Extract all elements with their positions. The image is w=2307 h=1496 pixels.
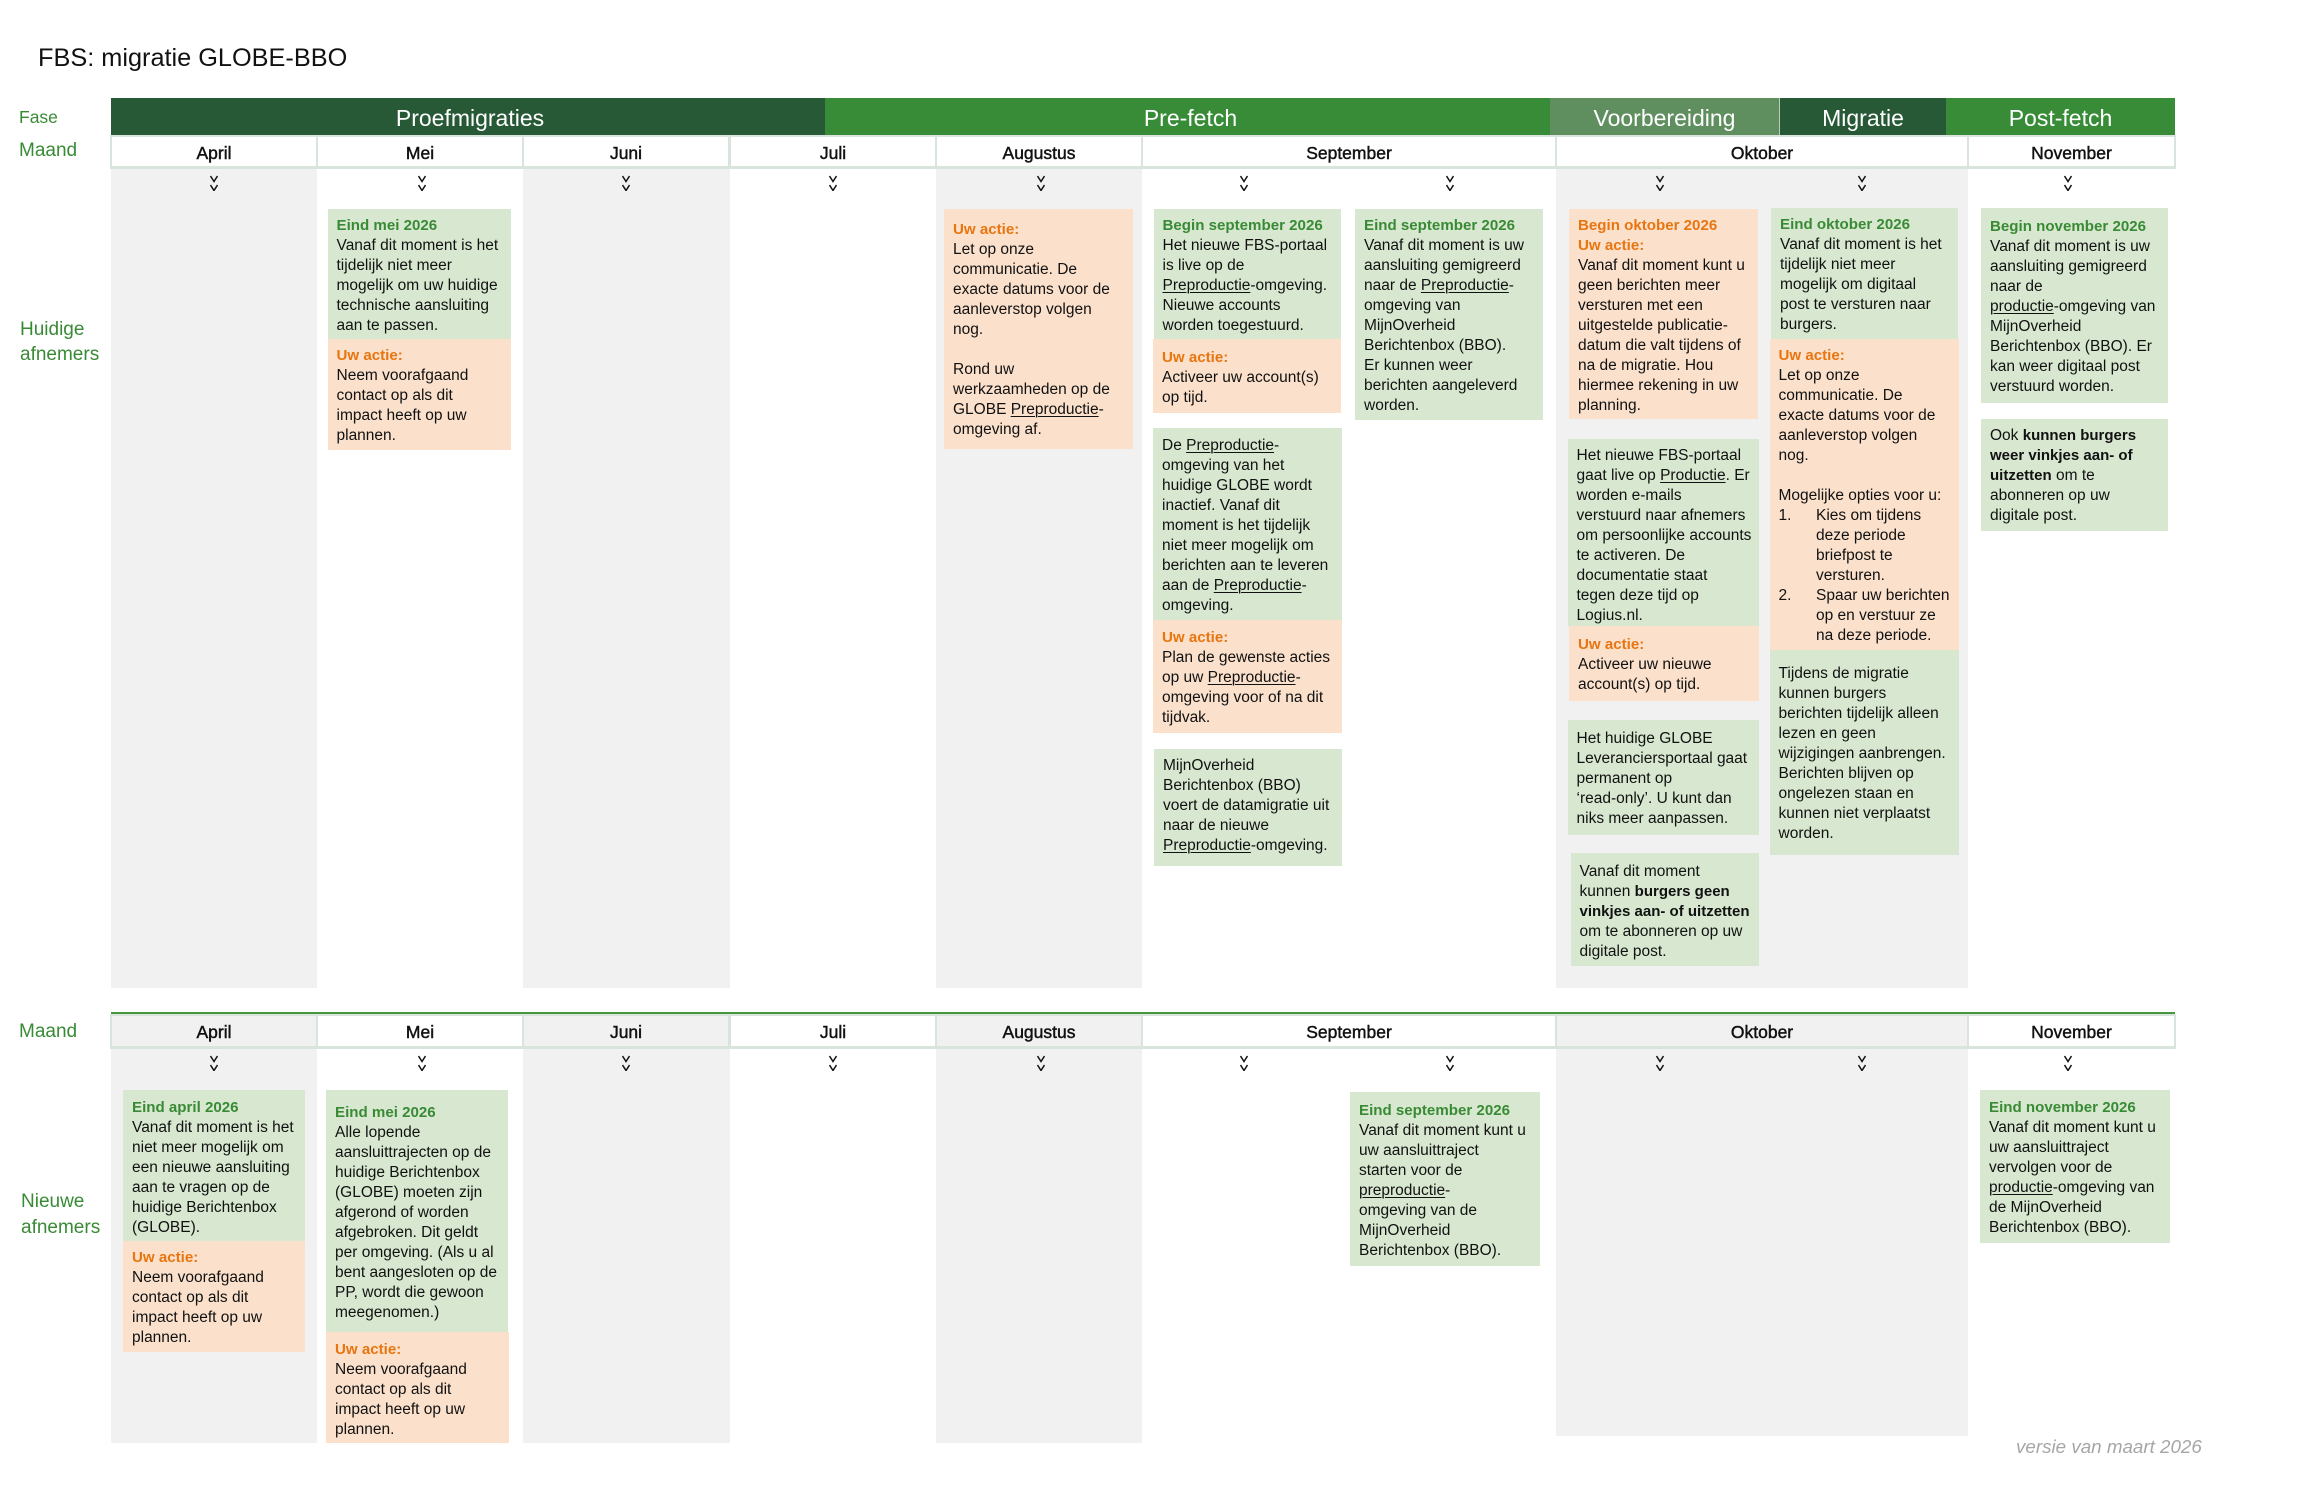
card: Eind mei 2026 (huidige afnemers) <box>328 209 511 450</box>
month: April <box>110 1014 318 1049</box>
card info: huidige GLOBE wordt <box>1162 477 1312 494</box>
card info: om persoonlijke accounts <box>1576 527 1751 544</box>
month: Oktober: Oktober <box>1731 143 1793 163</box>
card action: op tijd. <box>1162 389 1208 406</box>
card info: inactief. Vanaf dit <box>1162 497 1280 514</box>
side label: Huidige afnemers <box>20 319 99 365</box>
month: September <box>1141 135 1557 169</box>
card: Eind september 2026 (nieuwe afnemers): omgeving van de <box>1359 1202 1477 1218</box>
card: Eind september 2026 (nieuwe afnemers): starten voor de <box>1359 1162 1462 1178</box>
card: Augustus actie <box>944 209 1133 449</box>
card action: impact heeft op uw <box>335 1400 465 1418</box>
card info: tijdelijk niet meer <box>336 257 452 274</box>
card: vinkjes uitzetten <box>1570 853 1759 966</box>
version note: versie van maart 2026 <box>2016 1436 2202 1457</box>
card action: plannen. <box>335 1420 394 1438</box>
icon: chevron Mei <box>418 176 426 191</box>
card note: Berichten blijven op <box>1778 764 1914 782</box>
card: Eind september 2026: Eind september 2026 <box>1364 217 1515 234</box>
card note: wijzigingen aanbrengen. <box>1778 744 1946 762</box>
month: Juli <box>729 135 937 169</box>
card: Begin november 2026: aansluiting gemigreerd <box>1990 258 2147 275</box>
month: Mei: Mei <box>406 1022 434 1042</box>
card info: Preproductie-omgeving. <box>1162 277 1327 294</box>
card: Eind november 2026 (nieuwe afnemers): uw aansluittraject <box>1989 1138 2109 1156</box>
card: Eind november 2026 (nieuwe afnemers): vervolgen voor de <box>1989 1158 2112 1176</box>
icon: chevron begin Oktober <box>1656 1056 1664 1071</box>
card action: 1. <box>1778 507 1791 524</box>
month: November <box>1967 135 2176 169</box>
card: Augustus actie: Rond uw <box>953 361 1014 378</box>
month: November <box>1967 1014 2176 1049</box>
icon: chevron April <box>210 176 218 191</box>
card: Leveranciersportaal read-only: Het huidige GLOBE <box>1576 730 1713 747</box>
card info: is live op de <box>1162 257 1244 274</box>
card: vinkjes aanzetten: abonneren op uw <box>1990 487 2110 504</box>
card: Leveranciersportaal read-only: Leveranciersportaal gaat <box>1576 750 1747 767</box>
card info: niet meer mogelijk om <box>132 1138 284 1156</box>
card: Eind november 2026 (nieuwe afnemers) <box>1980 1090 2170 1243</box>
card: datamigratie BBO: MijnOverheid <box>1163 757 1254 774</box>
month: Augustus: Augustus <box>1003 143 1075 163</box>
phase: Voorbereiding: Voorbereiding <box>1594 105 1735 131</box>
card: Eind april 2026 (nieuwe afnemers) <box>123 1090 305 1352</box>
card: vinkjes uitzetten: vinkjes aan- of uitzetten <box>1580 903 1750 920</box>
card: Begin november 2026: verstuurd worden. <box>1990 378 2114 395</box>
month: November: November <box>2031 1022 2112 1042</box>
card: Leveranciersportaal read-only: niks meer aanpassen. <box>1576 810 1728 827</box>
card action: exacte datums voor de <box>1778 407 1935 424</box>
month: April <box>110 135 318 169</box>
card: Augustus actie: aanleverstop volgen <box>953 301 1092 318</box>
icon: chevron April <box>210 1056 218 1071</box>
month: Mei <box>316 1014 524 1049</box>
card action: op uw Preproductie- <box>1162 669 1301 686</box>
month: Mei <box>316 135 524 169</box>
card: Begin september 2026 <box>1153 209 1341 413</box>
card action: nog. <box>1778 447 1809 464</box>
card action <box>1153 339 1341 413</box>
card info: aan de Preproductie- <box>1162 577 1307 594</box>
icon: chevron eind Oktober <box>1858 176 1866 191</box>
card note: ongelezen staan en <box>1778 784 1914 802</box>
card: Eind september 2026 (nieuwe afnemers): Berichtenbox (BBO). <box>1359 1242 1501 1258</box>
row label: Maand (onder): Maand <box>19 1021 77 1042</box>
card: Begin oktober 2026: planning. <box>1578 397 1641 414</box>
month: Augustus <box>935 135 1143 169</box>
card: vinkjes uitzetten: kunnen burgers geen <box>1580 883 1730 900</box>
card action: deze periode <box>1816 527 1906 544</box>
card info: aan te passen. <box>336 317 438 334</box>
card: Eind mei 2026 (nieuwe afnemers) <box>326 1090 509 1443</box>
card: Augustus actie: nog. <box>953 321 983 338</box>
card: Augustus actie: Let op onze <box>953 241 1034 258</box>
icon: chevron Juni <box>622 1056 630 1071</box>
card: vinkjes aanzetten: weer vinkjes aan- of <box>1990 447 2133 464</box>
phase: Voorbereiding <box>1550 98 1779 135</box>
card action: 2. <box>1778 587 1791 604</box>
card: Eind september 2026: Vanaf dit moment is uw <box>1364 237 1524 254</box>
card action: Uw actie: <box>1578 636 1644 653</box>
card info: Eind oktober 2026 <box>1780 216 1910 233</box>
card action: briefpost te <box>1816 547 1893 564</box>
card action: Uw actie: <box>1162 629 1228 646</box>
card info: aansluittrajecten op de <box>335 1144 491 1160</box>
card: Augustus actie: GLOBE Preproductie- <box>953 401 1104 418</box>
card action: aanleverstop volgen <box>1778 427 1917 444</box>
card: Augustus actie: werkzaamheden op de <box>953 381 1110 398</box>
card: Begin november 2026: Berichtenbox (BBO). Er <box>1990 338 2152 355</box>
month: September <box>1141 1014 1557 1049</box>
card info: huidige Berichtenbox <box>132 1198 277 1216</box>
card: Begin oktober 2026: Uw actie: <box>1578 237 1644 254</box>
card note: lezen en geen <box>1778 724 1876 742</box>
card info: een nieuwe aansluiting <box>132 1158 290 1176</box>
month: Juni: Juni <box>610 143 642 163</box>
card: Eind september 2026: Berichtenbox (BBO). <box>1364 337 1506 354</box>
card action: Activeer uw nieuwe <box>1578 656 1712 673</box>
card info: niet meer mogelijk om <box>1162 537 1314 554</box>
phase bar <box>111 98 2175 135</box>
month: Juli: Juli <box>820 143 846 163</box>
card info: te activeren. De <box>1576 547 1685 564</box>
card action: versturen. <box>1816 567 1885 584</box>
card: datamigratie BBO: naar de nieuwe <box>1163 817 1269 834</box>
card: vinkjes uitzetten: Vanaf dit moment <box>1580 863 1700 880</box>
card action: communicatie. De <box>1778 387 1903 404</box>
card: Eind september 2026: omgeving van <box>1364 297 1461 314</box>
card info: (GLOBE) moeten zijn <box>335 1184 482 1200</box>
card action: impact heeft op uw <box>132 1309 262 1326</box>
card action <box>1569 626 1759 701</box>
card action: contact op als dit <box>336 387 453 404</box>
card action: Uw actie: <box>336 347 403 364</box>
card info: Vanaf dit moment is het <box>1780 236 1942 253</box>
card note: kunnen niet verplaatst <box>1778 804 1930 822</box>
card action: Kies om tijdens <box>1816 507 1921 524</box>
card: Eind september 2026 (nieuwe afnemers): preproductie- <box>1359 1182 1450 1198</box>
month: Juni <box>522 1014 730 1049</box>
column band: Augustus <box>936 1049 1142 1443</box>
card action: Plan de gewenste acties <box>1162 649 1330 666</box>
card action: Neem voorafgaand <box>336 367 468 384</box>
card: vinkjes aanzetten: uitzetten om te <box>1990 467 2095 484</box>
card: Augustus actie: communicatie. De <box>953 261 1077 278</box>
card: Begin oktober 2026 <box>1569 209 1758 419</box>
card: Augustus actie: exacte datums voor de <box>953 281 1110 298</box>
card: Eind september 2026: berichten aangeleverd <box>1364 377 1517 394</box>
card action: Uw actie: <box>132 1249 198 1266</box>
card: Eind september 2026 (nieuwe afnemers): Eind september 2026 <box>1359 1102 1510 1118</box>
month header row (bottom) <box>110 1014 2176 1049</box>
card: Begin november 2026: Vanaf dit moment is uw <box>1990 238 2150 255</box>
row label: Maand: Maand <box>19 140 77 161</box>
card info: Logius.nl. <box>1576 607 1643 624</box>
card action: Let op onze <box>1778 367 1860 384</box>
card action <box>326 1332 508 1443</box>
side label: Huidige afnemers: Huidige <box>20 319 84 340</box>
card action <box>328 339 511 450</box>
card: Begin oktober 2026: hiermee rekening in uw <box>1578 377 1738 394</box>
card action: Activeer uw account(s) <box>1162 369 1319 386</box>
phase: Proefmigraties: Proefmigraties <box>396 105 544 131</box>
card: datamigratie BBO: Preproductie-omgeving. <box>1163 837 1328 854</box>
icon: chevron eind September <box>1446 1056 1454 1071</box>
month: Juni <box>522 135 730 169</box>
card: Eind november 2026 (nieuwe afnemers): Eind november 2026 <box>1989 1098 2136 1116</box>
card action: Uw actie: <box>1778 347 1845 364</box>
card: vinkjes uitzetten: digitale post. <box>1580 943 1667 960</box>
card info: technische aansluiting <box>336 297 489 314</box>
card action: plannen. <box>132 1329 191 1346</box>
column band: Oktober <box>1556 169 1968 988</box>
card info <box>328 209 511 339</box>
card: Eind september 2026 (nieuwe afnemers) <box>1350 1092 1540 1266</box>
card info: Vanaf dit moment is het <box>336 237 498 254</box>
card info: Begin september 2026 <box>1162 217 1323 234</box>
icon: chevron Mei <box>418 1056 426 1071</box>
month: Juli <box>729 1014 937 1049</box>
card: Begin november 2026 <box>1981 208 2168 402</box>
card info: Vanaf dit moment is het <box>132 1118 294 1136</box>
card: Begin oktober 2026: na de migratie. Hou <box>1578 357 1713 374</box>
card: FBS-portaal live op Productie <box>1568 439 1759 701</box>
card: vinkjes uitzetten: om te abonneren op uw <box>1580 923 1742 940</box>
card info <box>1153 428 1342 620</box>
month header row (top) <box>110 135 2176 169</box>
card info: berichten aan te leveren <box>1162 557 1328 574</box>
icon: chevron eind Oktober <box>1858 1056 1866 1071</box>
card: Eind november 2026 (nieuwe afnemers): Berichtenbox (BBO). <box>1989 1218 2131 1236</box>
card: vinkjes aanzetten <box>1981 418 2168 530</box>
card action <box>123 1241 304 1352</box>
card info: moment is het tijdelijk <box>1162 517 1310 534</box>
card action: contact op als dit <box>335 1380 451 1398</box>
card: Eind november 2026 (nieuwe afnemers): productie-omgeving van <box>1989 1178 2154 1196</box>
card: Eind november 2026 (nieuwe afnemers): de MijnOverheid <box>1989 1198 2102 1216</box>
card info: meegenomen.) <box>335 1304 439 1320</box>
card: Augustus actie: omgeving af. <box>953 421 1042 438</box>
card info: tegen deze tijd op <box>1576 587 1699 604</box>
card: Begin oktober 2026: Begin oktober 2026 <box>1578 217 1717 234</box>
card info: huidige Berichtenbox <box>335 1164 480 1180</box>
card info: post te versturen naar <box>1780 296 1931 313</box>
month: Augustus: Augustus <box>1003 1022 1075 1042</box>
card: Eind september 2026: Er kunnen weer <box>1364 357 1473 374</box>
card: Begin oktober 2026: datum die valt tijdens of <box>1578 337 1741 354</box>
card info: omgeving. <box>1162 597 1234 614</box>
card info: (GLOBE). <box>132 1218 200 1236</box>
card action: plannen. <box>336 427 396 444</box>
card info <box>1771 208 1958 339</box>
icon: chevron Juli <box>829 176 837 191</box>
card: Eind september 2026 <box>1355 209 1542 420</box>
card action: Neem voorafgaand <box>335 1360 467 1378</box>
card: Begin oktober 2026: geen berichten meer <box>1578 277 1720 294</box>
card: Augustus actie: Uw actie: <box>953 221 1019 238</box>
card info: worden toegestuurd. <box>1162 317 1304 334</box>
month: September: September <box>1306 1022 1392 1042</box>
card info: Eind mei 2026 <box>336 217 437 234</box>
card: Begin oktober 2026: uitgestelde publicatie- <box>1578 317 1728 334</box>
card info: per omgeving. (Als u al <box>335 1244 494 1260</box>
month: Mei: Mei <box>406 143 434 163</box>
card action: Mogelijke opties voor u: <box>1778 487 1941 504</box>
card info: aan te vragen op de <box>132 1178 270 1196</box>
card info <box>1154 209 1341 339</box>
card: Leveranciersportaal read-only: ‘read-only’. U kunt dan <box>1576 790 1732 807</box>
phase: Pre-fetch <box>825 98 1550 135</box>
card: Begin november 2026: naar de <box>1990 278 2043 295</box>
card info <box>326 1090 508 1332</box>
card info: omgeving van het <box>1162 457 1284 474</box>
card info: gaat live op Productie. Er <box>1576 467 1750 484</box>
card action: Uw actie: <box>1162 349 1228 366</box>
side label: Nieuwe afnemers <box>21 1191 100 1238</box>
card info: Het nieuwe FBS-portaal <box>1576 447 1741 464</box>
card: Eind september 2026: worden. <box>1364 397 1419 414</box>
card info: tijdelijk niet meer <box>1780 256 1895 273</box>
card: Begin november 2026: MijnOverheid <box>1990 318 2081 335</box>
card info: mogelijk om uw huidige <box>336 277 498 294</box>
phase: Pre-fetch: Pre-fetch <box>1144 105 1237 131</box>
month: Oktober: Oktober <box>1731 1022 1793 1042</box>
month: Juli: Juli <box>820 1022 846 1042</box>
card info: afgebroken. Dit geldt <box>335 1224 478 1240</box>
card info: afgerond of worden <box>335 1204 469 1220</box>
phase: Migratie: Migratie <box>1822 105 1904 131</box>
card info: Eind mei 2026 <box>335 1104 436 1120</box>
card note: berichten tijdelijk alleen <box>1778 704 1939 722</box>
column band: Juni <box>523 1049 730 1443</box>
side label: Huidige afnemers: afnemers <box>20 344 99 365</box>
phase: Post-fetch: Post-fetch <box>2009 105 2112 131</box>
icon: chevron begin September <box>1240 1056 1248 1071</box>
icon: chevron Augustus <box>1037 176 1045 191</box>
card: Begin oktober 2026: versturen met een <box>1578 297 1703 314</box>
month: April: April <box>196 143 232 163</box>
icon: chevron Juli <box>829 1056 837 1071</box>
card: Eind september 2026 (nieuwe afnemers): uw aansluittraject <box>1359 1142 1479 1158</box>
divider line: nieuwe afnemers <box>111 1012 2175 1014</box>
card info: documentatie staat <box>1576 567 1707 584</box>
card action: Uw actie: <box>335 1340 401 1358</box>
month: April: April <box>196 1022 232 1042</box>
side label: Nieuwe afnemers: Nieuwe <box>21 1191 84 1212</box>
card info: bent aangesloten op de <box>335 1264 497 1280</box>
card note: worden. <box>1778 824 1834 842</box>
card info: verstuurd naar afnemers <box>1576 507 1745 524</box>
icon: chevron begin Oktober <box>1656 176 1664 191</box>
icon: chevron November <box>2064 176 2072 191</box>
card: datamigratie BBO <box>1154 749 1342 866</box>
card info: PP, wordt die gewoon <box>335 1284 484 1300</box>
card: Eind november 2026 (nieuwe afnemers): Vanaf dit moment kunt u <box>1989 1118 2156 1136</box>
month: November: November <box>2031 143 2112 163</box>
card info <box>123 1090 304 1241</box>
card action: contact op als dit <box>132 1289 248 1306</box>
card action: account(s) op tijd. <box>1578 676 1700 693</box>
column band: Augustus <box>936 169 1142 988</box>
card: Eind september 2026 (nieuwe afnemers): Vanaf dit moment kunt u <box>1359 1122 1526 1138</box>
card action <box>1770 339 1958 650</box>
card action: Neem voorafgaand <box>132 1269 264 1286</box>
card info: burgers. <box>1780 316 1837 333</box>
phase: Migratie <box>1779 98 1946 135</box>
card: Begin november 2026: Begin november 2026 <box>1990 218 2146 235</box>
card: Eind september 2026: MijnOverheid <box>1364 317 1455 334</box>
icon: chevron eind September <box>1446 176 1454 191</box>
card: Eind september 2026: aansluiting gemigreerd <box>1364 257 1521 274</box>
column band: Juni <box>523 169 730 988</box>
card: Begin oktober 2026: Vanaf dit moment kunt u <box>1578 257 1745 274</box>
row label: Fase: Fase <box>19 107 58 127</box>
month: September: September <box>1306 143 1392 163</box>
card: vinkjes aanzetten: digitale post. <box>1990 507 2077 524</box>
icon: chevron begin September <box>1240 176 1248 191</box>
card note: kunnen burgers <box>1778 684 1886 702</box>
card action: op en verstuur ze <box>1816 607 1936 624</box>
card info: De Preproductie- <box>1162 437 1279 454</box>
title: FBS: migratie GLOBE-BBO <box>38 44 347 72</box>
month: Augustus <box>935 1014 1143 1049</box>
icon: chevron Juni <box>622 176 630 191</box>
card: Leveranciersportaal read-only <box>1568 720 1759 835</box>
phase: Post-fetch <box>1946 98 2175 135</box>
card: Eind september 2026 (nieuwe afnemers): MijnOverheid <box>1359 1222 1450 1238</box>
card: Eind oktober 2026 <box>1770 208 1959 855</box>
card: Preproductie inactief <box>1153 428 1342 733</box>
card info: Eind april 2026 <box>132 1098 239 1116</box>
card action: Spaar uw berichten <box>1816 587 1950 604</box>
card action <box>1153 620 1342 732</box>
card action: tijdvak. <box>1162 709 1210 726</box>
card info: Alle lopende <box>335 1124 420 1140</box>
card: datamigratie BBO: voert de datamigratie uit <box>1163 797 1329 814</box>
column band: April <box>111 1049 317 1443</box>
card note <box>1770 650 1958 854</box>
icon: chevron Augustus <box>1037 1056 1045 1071</box>
card: Leveranciersportaal read-only: permanent op <box>1576 770 1672 787</box>
card action: omgeving voor of na dit <box>1162 689 1323 706</box>
card: datamigratie BBO: Berichtenbox (BBO) <box>1163 777 1301 794</box>
card: vinkjes aanzetten: Ook kunnen burgers <box>1990 427 2136 444</box>
icon: chevron November <box>2064 1056 2072 1071</box>
card action: impact heeft op uw <box>336 407 467 424</box>
card info: Nieuwe accounts <box>1162 297 1281 314</box>
card note: Tijdens de migratie <box>1778 664 1909 682</box>
column band: April <box>111 169 317 988</box>
month: Oktober <box>1555 135 1969 169</box>
column band: Oktober <box>1556 1049 1968 1436</box>
card info: worden e-mails <box>1576 487 1682 504</box>
month: Juni: Juni <box>610 1022 642 1042</box>
card: Eind september 2026: naar de Preproductie- <box>1364 277 1514 294</box>
phase: Proefmigraties <box>111 98 825 135</box>
card info <box>1568 439 1759 626</box>
card action: na deze periode. <box>1816 627 1931 644</box>
month: Oktober <box>1555 1014 1969 1049</box>
card: Begin november 2026: productie-omgeving van <box>1990 298 2155 315</box>
card info: Het nieuwe FBS-portaal <box>1162 237 1327 254</box>
side label: Nieuwe afnemers: afnemers <box>21 1216 100 1238</box>
card info: mogelijk om digitaal <box>1780 276 1916 293</box>
card: Begin november 2026: kan weer digitaal post <box>1990 358 2140 375</box>
